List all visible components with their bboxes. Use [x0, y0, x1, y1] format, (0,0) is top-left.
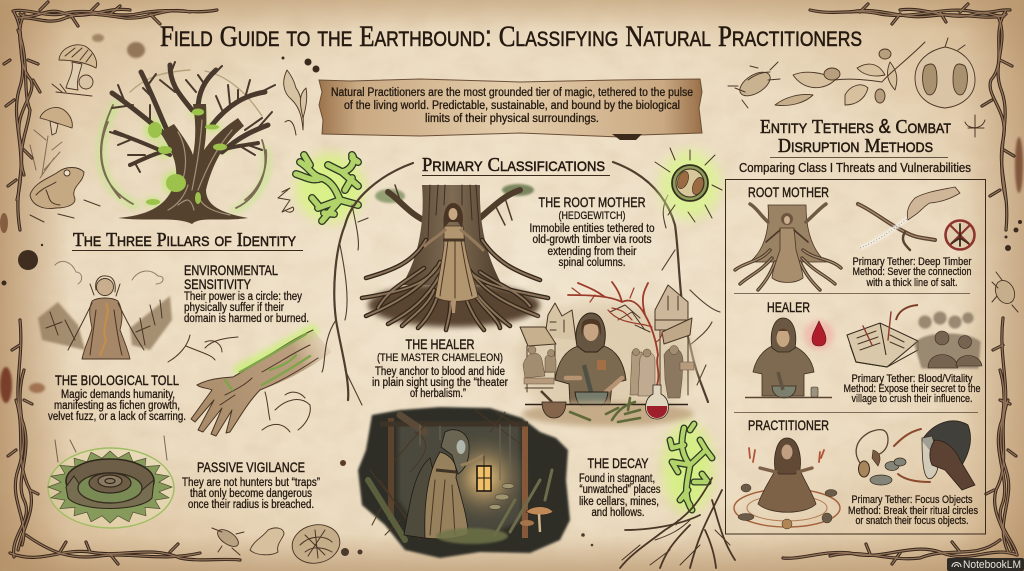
text: environmental sensitivity: SENSITIVITY — [184, 277, 251, 292]
text: passive vigilance: that only become dangerous — [190, 488, 312, 500]
text: the root mother: old-growth timber via roots — [532, 234, 652, 246]
text: the root mother: extending from their — [548, 246, 637, 258]
text: the root mother — [530, 195, 654, 269]
text: the root mother: THE ROOT MOTHER — [538, 195, 646, 210]
text: the healer: in plain sight using the “theater — [372, 377, 508, 389]
watermark: NotebookLM: NotebookLM — [963, 559, 1021, 571]
row: root mother: with a thick line of salt. — [866, 277, 958, 289]
row: root mother: Method: Sever the connection — [852, 266, 972, 278]
heading: entity tethers and combat disruption methods: Disruption Methods — [778, 135, 933, 157]
illustration: environmental sensitivity figure — [38, 261, 172, 359]
row: healer: village to crush their influence. — [852, 393, 972, 405]
text: the decay: like cellars, mines, — [579, 496, 659, 508]
text: environmental sensitivity: ENVIRONMENTAL — [184, 263, 278, 278]
banner: introduction: of the living world. Predictable, sustainable, and bound by the biological — [344, 100, 680, 112]
icon: seed pod in lichen — [655, 148, 722, 222]
heading: entity tethers and combat disruption methods — [760, 116, 951, 158]
text: the root mother: Immobile entities tethered to — [530, 223, 654, 235]
row: healer: Method: Expose their secret to the — [844, 383, 980, 395]
row: practitioner: Primary Tether: Focus Objects — [852, 494, 973, 506]
heading: primary classifications: Primary Classifications — [422, 154, 605, 176]
sketch: mushrooms and frog top left — [30, 45, 100, 222]
illustration: root nest with green radius — [48, 436, 174, 528]
text: the biological toll: manifesting as fichen growth, — [54, 400, 180, 412]
subheading: comparing class I threats: Comparing Class I Threats and Vulnerabilities — [739, 161, 971, 175]
text: the healer: They anchor to blood and hide — [375, 366, 505, 378]
row: practitioner: Method: Break their ritual circles — [848, 505, 978, 517]
row: root mother: Primary Tether: Deep Timber — [852, 256, 972, 268]
text: the biological toll: THE BIOLOGICAL TOLL — [55, 373, 179, 388]
text: the decay: THE DECAY — [588, 456, 648, 471]
text: the root mother: (HEDGEWITCH) — [558, 210, 626, 222]
text: the decay: Found in stagnant, — [579, 473, 655, 485]
text: environmental sensitivity: Their power is a circle: they — [184, 291, 302, 303]
decorative roots centre — [322, 162, 720, 405]
panel: tethers comparison table — [726, 180, 986, 534]
text: the root mother: spinal columns. — [558, 257, 626, 269]
icon: glowing lichen lower right — [663, 423, 713, 513]
row: root mother: ROOT MOTHER — [748, 185, 829, 200]
row: healer: Primary Tether: Blood/Vitality — [852, 373, 973, 385]
text: the decay: “unwatched” places — [580, 484, 661, 496]
text: environmental sensitivity: physically suffer if their — [184, 302, 284, 314]
text: passive vigilance — [182, 460, 320, 511]
icon: gnarled tree with green moss — [101, 62, 275, 224]
banner: introduction — [319, 79, 702, 140]
text: the healer: of herbalism.” — [410, 388, 466, 400]
heading: the three pillars of identity: The Three Pillars of Identity — [73, 229, 297, 251]
illustration: the decay in a mine — [358, 407, 570, 558]
text: the healer: THE HEALER — [406, 337, 475, 352]
banner: introduction: limits of their physical surroundings. — [425, 113, 599, 125]
icon: glowing lichen left — [296, 154, 364, 222]
row: healer: HEALER — [767, 300, 810, 315]
text: the decay: and hollows. — [592, 507, 644, 519]
row: healer — [745, 300, 982, 405]
sketch: corner roots lower centre — [620, 478, 735, 568]
row: practitioner: PRACTITIONER — [748, 418, 829, 433]
row: practitioner — [734, 418, 978, 529]
sketch: beetle, oak leaves and seed pod top right — [728, 38, 985, 137]
text: the decay — [579, 456, 661, 519]
row: root mother — [735, 185, 974, 290]
text: the biological toll: Magic demands humanity, — [61, 389, 175, 401]
text: passive vigilance: They are not hunters but “traps” — [182, 477, 320, 489]
text: environmental sensitivity — [184, 263, 309, 325]
text: environmental sensitivity: domain is harmed or burned. — [184, 313, 309, 325]
row: practitioner: or snatch their focus objects. — [856, 515, 968, 527]
title: Field Guide to the Earthbound: Classifying Natural Practitioners — [160, 20, 862, 53]
banner: introduction: Natural Practitioners are the most grounded tier of magic, tethered to the pulse — [331, 87, 693, 99]
text: passive vigilance: PASSIVE VIGILANCE — [197, 460, 305, 475]
text: the healer: (THE MASTER CHAMELEON) — [377, 352, 503, 364]
text: passive vigilance: once their radius is breached. — [188, 499, 314, 511]
text: the biological toll: velvet fuzz, or a lack of scarring. — [48, 411, 186, 423]
text: the biological toll — [48, 373, 186, 423]
illustration: root mother — [362, 184, 548, 330]
text: the healer — [372, 337, 508, 400]
illustration: healer at market — [516, 282, 696, 426]
sketch: beetle right margin — [992, 272, 1018, 312]
illustration: arm with lichen growth — [168, 330, 332, 436]
sketch: beetle, frog and fungus slice — [212, 520, 343, 568]
heading: entity tethers and combat disruption methods: Entity Tethers & Combat — [760, 116, 951, 138]
sketch: leaf and rune — [278, 70, 307, 212]
